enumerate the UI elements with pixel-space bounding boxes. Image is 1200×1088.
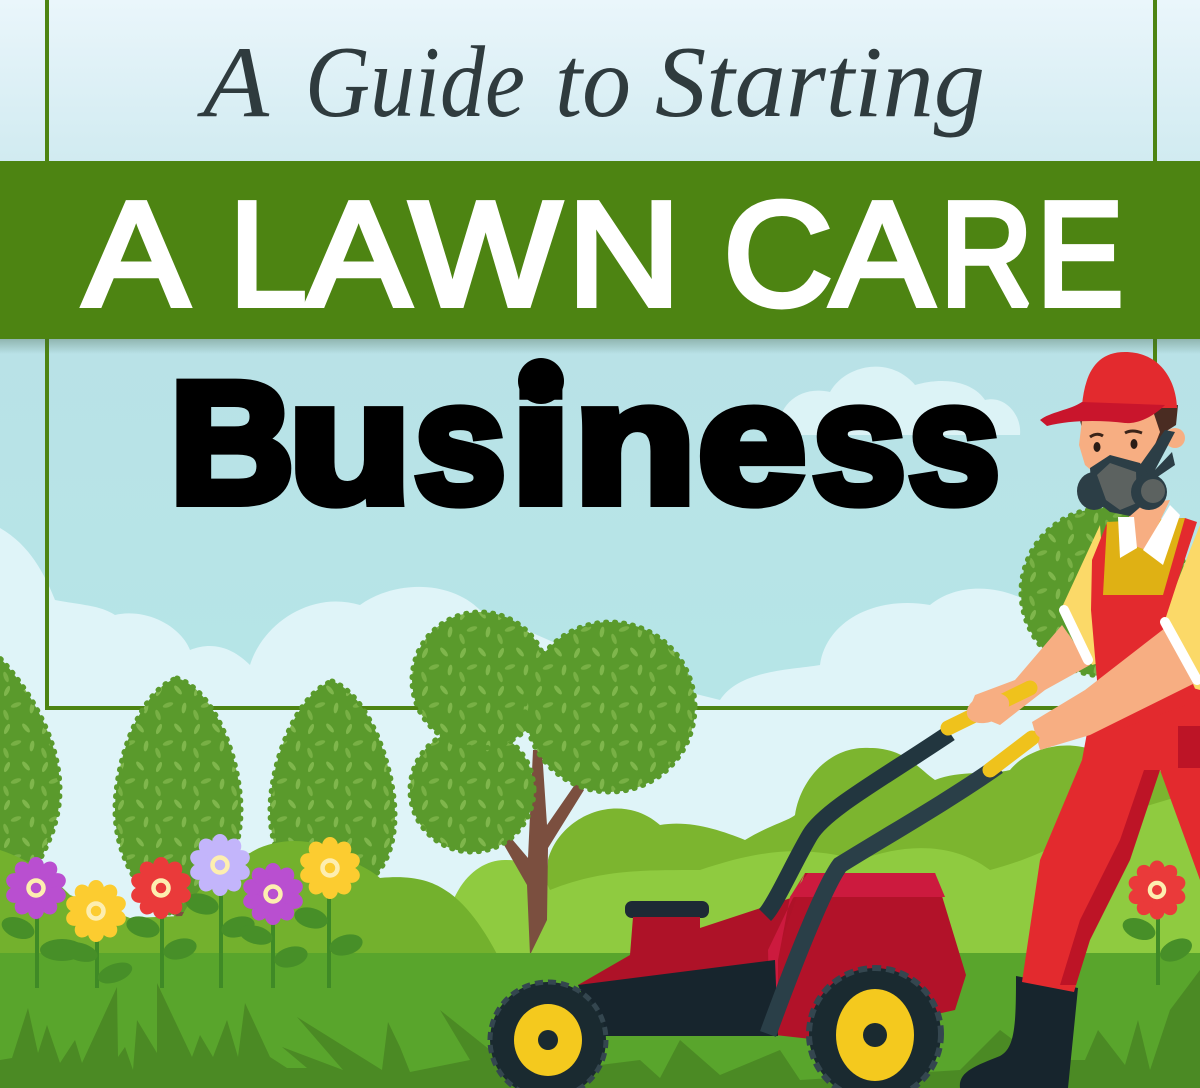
left cuff: [1064, 610, 1088, 660]
rear wheel: [490, 982, 606, 1088]
flower stems and leaves: [0, 890, 1196, 988]
background shrubs: [444, 746, 1200, 960]
flower: gold: [298, 837, 362, 899]
tree: left: [115, 678, 241, 918]
heading: Business: [170, 346, 1000, 539]
tree: far left: [0, 658, 60, 890]
tree stub: [176, 912, 185, 924]
cap dome: [1082, 352, 1177, 412]
cypress trees: [0, 658, 395, 924]
flower: red right: [1127, 861, 1187, 919]
cloud: behind Business: [778, 367, 1020, 435]
heading: Business: e: [698, 346, 806, 539]
heading: Business: i: [510, 346, 572, 539]
mower hood highlight: [790, 873, 945, 897]
round tree: [410, 612, 695, 955]
right arm: [1032, 628, 1197, 750]
ground lawn: [0, 953, 1200, 1088]
banner: [0, 161, 1200, 354]
tree crowns: [410, 612, 695, 852]
banner heading: A LAWN CARE: C: [723, 171, 833, 337]
title: A Guide to Starting: Guide: [305, 26, 525, 139]
flower: violet: [241, 863, 305, 925]
shirt collar: [1118, 505, 1180, 565]
cloud: lower band: [0, 528, 1200, 960]
banner heading: A LAWN CARE: A: [831, 171, 934, 336]
clouds: [0, 367, 1200, 960]
hands: [963, 687, 1085, 746]
leg shadow: [1060, 770, 1160, 985]
neck: [1127, 500, 1170, 550]
left arm: [968, 625, 1090, 725]
respirator mask: [1077, 430, 1175, 516]
heading: Business: s: [908, 346, 1000, 539]
mower hood left edge: [768, 873, 805, 1034]
mower engine cap: [625, 901, 709, 918]
right cuff: [1165, 622, 1197, 680]
left hedge: [0, 841, 500, 960]
mower handle rear: [765, 733, 950, 915]
title: A Guide to Starting: Starting: [655, 26, 985, 139]
shrub: front bright green: [444, 790, 1200, 960]
banner heading: A LAWN CARE: R: [940, 172, 1033, 337]
banner heading: A LAWN CARE: E: [1037, 171, 1123, 337]
right sleeve: [1163, 525, 1200, 690]
heading: Business: s: [414, 346, 506, 539]
banner heading: A LAWN CARE: [84, 171, 1123, 337]
mower grips: [948, 688, 1032, 770]
tree trunk: [500, 750, 584, 955]
title: A Guide to Starting: to: [555, 26, 631, 139]
boot: [960, 976, 1078, 1088]
heading: Business: B: [170, 347, 294, 539]
banner heading: A LAWN CARE: N: [567, 172, 681, 337]
eyes and brows: [1090, 431, 1142, 452]
flower: purple: [4, 857, 68, 919]
mower engine block: [578, 895, 800, 1000]
overall bib: [1090, 518, 1200, 740]
flower: lavender: [188, 834, 252, 896]
mower chassis: [578, 960, 778, 1036]
flowers: [0, 834, 1196, 988]
front wheel: [809, 968, 941, 1088]
foreground grass: [0, 970, 1200, 1088]
banner heading: A LAWN CARE: A: [84, 172, 189, 337]
heading: Business: s: [812, 347, 906, 539]
mower handle front: [768, 766, 998, 1034]
title: A Guide to Starting: [197, 26, 985, 139]
shrub: back darker green: [540, 746, 1200, 960]
heading: Business: u: [289, 347, 411, 539]
mower hood: [775, 873, 966, 1040]
overall pocket: [1178, 726, 1200, 768]
hair: [1078, 405, 1178, 460]
face: [1079, 414, 1160, 478]
bush behind gardener: [1021, 508, 1189, 676]
heading: Business: n: [574, 347, 696, 539]
left sleeve: [1063, 525, 1110, 665]
overall legs: [1022, 655, 1200, 992]
cap brim: [1040, 402, 1165, 426]
title: A Guide to Starting: A: [197, 26, 270, 139]
flower: red: [129, 857, 193, 919]
frame lines: [45, 0, 1157, 710]
gardener: [948, 352, 1200, 1088]
lawn mower: [490, 733, 998, 1088]
tree: middle: [270, 681, 395, 885]
gold undershirt: [1103, 518, 1185, 595]
flower: yellow: [64, 880, 128, 942]
ear: [1165, 428, 1185, 448]
banner heading: A LAWN CARE: A: [307, 172, 410, 337]
banner shadow: [0, 338, 1200, 354]
banner bar: [0, 161, 1200, 339]
banner heading: A LAWN CARE: L: [229, 172, 307, 337]
banner heading: A LAWN CARE: W: [410, 171, 561, 337]
